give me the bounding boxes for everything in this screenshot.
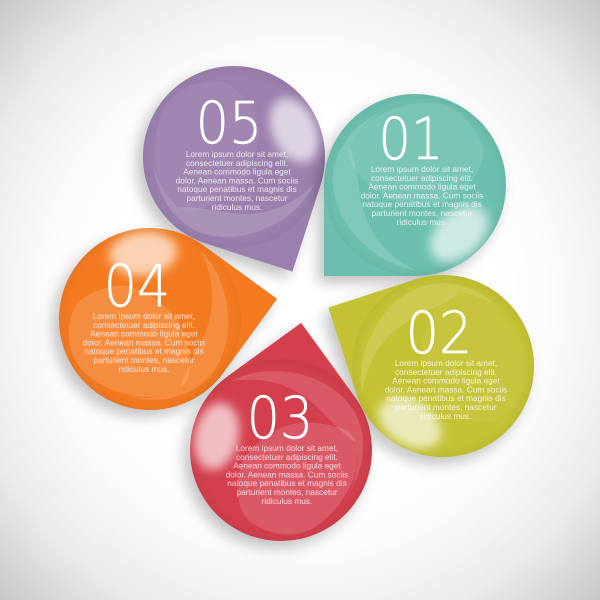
text 01: ridiculus mus.: [397, 217, 447, 227]
drop shape 04: [23, 192, 277, 446]
text 05: consectetuer adipiscing elit.: [186, 158, 288, 168]
text 02: natoque penatibus et magnis dis: [386, 393, 506, 403]
text 03: Aenean commodo ligula eget: [233, 461, 341, 471]
shadow 02: [322, 258, 552, 488]
text 02: dolor. Aenean massa. Cum sociis: [385, 384, 507, 394]
number 02: 02: [406, 300, 472, 368]
blob highlight 01: [349, 103, 483, 204]
text 04: ridiculus mus.: [119, 364, 169, 374]
panel: step 05 purple drop: [113, 42, 349, 279]
shadow 03: [148, 330, 402, 584]
drop shape 05: [119, 42, 349, 272]
text 01: natoque penatibus et magnis dis: [362, 199, 482, 209]
text 03: ridiculus mus.: [262, 496, 312, 506]
text 03: Lorem ipsum dolor sit amet,: [236, 443, 338, 453]
text 02: consectetuer adipiscing elit.: [395, 367, 497, 377]
text 05: natoque penatibus et magnis dis: [177, 184, 297, 194]
gloss 05: [119, 42, 349, 272]
text 05: ridiculus mus.: [212, 202, 262, 212]
text 05: Aenean commodo ligula eget: [183, 167, 291, 177]
text 03: dolor. Aenean massa. Cum sociis: [226, 469, 348, 479]
blob highlight 02: [404, 278, 542, 437]
text 05: dolor. Aenean massa. Cum sociis: [176, 175, 298, 185]
gloss 03: [154, 323, 408, 577]
blob highlight 03: [214, 395, 383, 557]
gloss 02: [328, 251, 558, 481]
shadow 05: [113, 49, 343, 279]
panel: step 02 yellow-green drop: [322, 251, 558, 488]
text 01: dolor. Aenean massa. Cum sociis: [361, 190, 483, 200]
text 04: parturient montes, nascetur: [94, 355, 195, 365]
drop shape 02: [328, 251, 558, 481]
text 02: Aenean commodo ligula eget: [392, 376, 500, 386]
text 02: ridiculus mus.: [421, 411, 471, 421]
text 01: parturient montes, nascetur: [372, 208, 473, 218]
text 02: Lorem ipsum dolor sit amet,: [395, 358, 497, 368]
gloss 04: [23, 192, 277, 446]
text 01: Aenean commodo ligula eget: [368, 182, 476, 192]
shadow 01: [318, 101, 500, 283]
text 04: Aenean commodo ligula eget: [90, 329, 198, 339]
text 01: consectetuer adipiscing elit.: [371, 173, 473, 183]
text 04: natoque penatibus et magnis dis: [84, 346, 204, 356]
panel: step 03 red drop: [148, 323, 408, 584]
number 01: 01: [379, 105, 443, 173]
text 03: parturient montes, nascetur: [236, 487, 338, 497]
text 01: Lorem ipsum dolor sit amet,: [371, 164, 473, 174]
gloss 01: [324, 94, 506, 276]
text 05: parturient montes, nascetur: [186, 193, 288, 203]
text 04: Lorem ipsum dolor sit amet,: [93, 311, 195, 321]
panel: step 01 teal drop: [318, 94, 506, 283]
drop shape 01: [324, 94, 506, 276]
text 04: dolor. Aenean massa. Cum sociis: [83, 337, 205, 347]
text 04: consectetuer adipiscing elit.: [93, 320, 195, 330]
number 03: 03: [247, 385, 313, 453]
text 02: parturient montes, nascetur: [396, 402, 497, 412]
panel: step 04 orange drop: [17, 192, 277, 453]
text 05: Lorem ipsum dolor sit amet,: [186, 149, 288, 159]
text 03: natoque penatibus et magnis dis: [227, 478, 347, 488]
blob highlight 05: [135, 67, 274, 226]
number 05: 05: [196, 90, 262, 158]
drop shape 03: [154, 323, 408, 577]
blob highlight 04: [47, 263, 215, 425]
number 04: 04: [104, 253, 170, 321]
text 03: consectetuer adipiscing elit.: [236, 452, 338, 462]
shadow 04: [17, 199, 271, 453]
